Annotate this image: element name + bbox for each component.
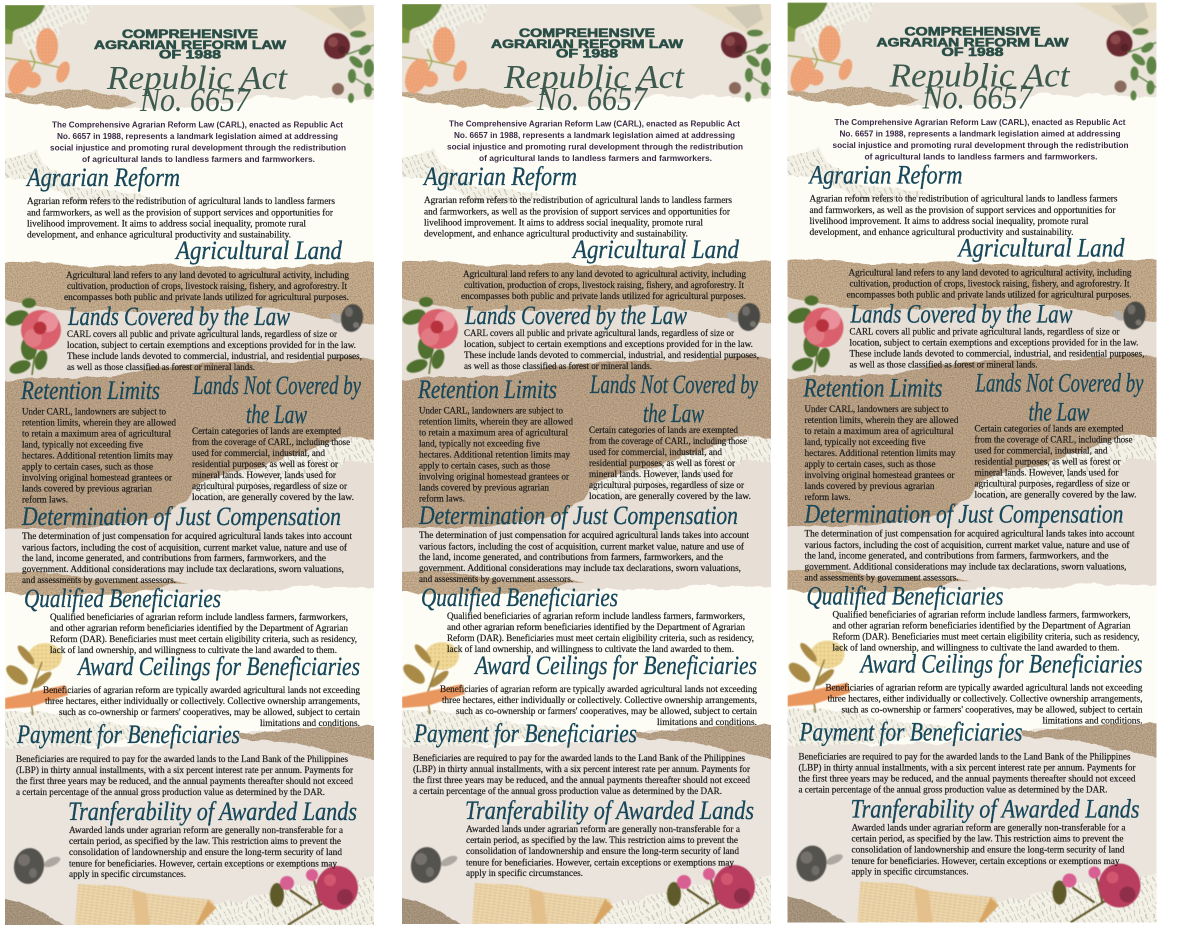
text: Agricultural Land: encompasses both public and private lands utilized for agricultural purposes. [846, 290, 1132, 300]
text: Lands Covered: as well as those classified as forest or mineral lands. [464, 361, 652, 371]
text: Retention Limits: hectares. Additional retention limits may [804, 448, 956, 458]
text: Lands Covered [67, 329, 362, 372]
heading: Lands Not Covered by the Law: the Law [246, 400, 307, 429]
heading: Payment for Beneficiaries: Payment for Beneficiaries [16, 720, 240, 749]
text: Agricultural Land: encompasses both public and private lands utilized for agricultural purposes. [64, 292, 349, 302]
text: Agrarian Reform: and farmworkers, as well as the provision of support services and opportunities for [27, 208, 333, 218]
heading: Lands Not Covered by the Law [589, 370, 758, 428]
text: Lands Covered: These include lands devoted to commercial, industrial, and residential purposes, [67, 351, 362, 361]
text: Retention Limits: hectares. Additional retention limits may [22, 450, 174, 460]
text: Lands Not Covered: agricultural purposes, regardless of size or [974, 478, 1130, 488]
text: Payment: (LBP) in thirty annual installments, with a six percent interest rate per annum. Payments for [413, 764, 750, 774]
intro text: The Comprehensive Agrarian Reform Law (CARL), enacted as Republic Act [449, 118, 740, 128]
text: Just Compensation: various factors, including the cost of acquisition, current market value, nature and use of [804, 540, 1130, 550]
text: Award Ceilings: limitations and conditions. [657, 717, 757, 727]
text: Qualified Beneficiaries: Reform (DAR). Beneficiaries must meet certain eligibility criteria, such as residency, [832, 632, 1140, 642]
icon: butterfly lower [794, 843, 844, 884]
heading: Tranferability of Awarded Lands: Tranferability of Awarded Lands [850, 794, 1140, 824]
text: Award Ceilings: Beneficiaries of agrarian reform are typically awarded agricultural lands not exceeding [440, 684, 757, 694]
text: Just Compensation: various factors, including the cost of acquisition, current market value, nature and use of [419, 542, 744, 552]
text: Retention Limits: land, typically not exceeding five [804, 437, 926, 447]
heading: Lands Covered by the Law: Lands Covered by the Law [67, 302, 291, 331]
title: AGRARIAN REFORM LAW [876, 36, 1069, 50]
heading: Agricultural Land: Agricultural Land [571, 235, 740, 264]
subtitle: Republic Act: No. 6657 [922, 80, 1034, 116]
intro text: No. 6657 in 1988, represents a landmark legislation aimed at addressing [454, 130, 735, 140]
text: Agrarian Reform: development, and enhance agricultural productivity and sustainability. [810, 227, 1074, 237]
text: Retention Limits: lands covered by previous agrarian [22, 484, 153, 494]
text: Tranferability: tenure for beneficiaries. However, certain exceptions or exemptions may [466, 858, 734, 868]
subtitle: Republic Act [106, 60, 289, 119]
text: Agrarian Reform [27, 196, 336, 240]
heading: Agricultural Land: Agricultural Land [174, 236, 343, 265]
text: Lands Not Covered: residential purposes, as well as forest or [192, 459, 338, 469]
text: Agricultural Land [64, 270, 350, 302]
text: Lands Not Covered: mineral lands. However, lands used for [192, 470, 336, 480]
text: Qualified Beneficiaries: and other agrarian reform beneficiaries identified by the Department of Agrarian [832, 620, 1131, 630]
text: Just Compensation: the land, income generated, and contributions from farmers, farmworkers, and the [22, 553, 326, 563]
text: Lands Covered: location, subject to certain exemptions and exceptions provided for in the law. [67, 340, 356, 350]
text: Just Compensation [22, 531, 353, 585]
text: Qualified Beneficiaries: lack of land ownership, and willingness to cultivate the land awarded to them. [50, 645, 337, 655]
decoration: pink flower [270, 866, 358, 925]
subtitle: Republic Act: No. 6657 [536, 81, 649, 118]
text: Payment: the first three years may be reduced, and the annual payments thereafter should not exceed [16, 776, 354, 786]
text: Agricultural Land: Agricultural land refers to any land devoted to agricultural activity, including [463, 269, 747, 279]
title: COMPREHENSIVE [122, 27, 258, 41]
decoration: flowers and book at top [401, 4, 771, 102]
text: Lands Covered [850, 326, 1144, 370]
intro text [832, 117, 1128, 162]
text: Retention Limits: Under CARL, landowners are subject to [804, 404, 949, 414]
heading: Tranferability of Awarded Lands: Tranferability of Awarded Lands [68, 797, 357, 826]
text: Payment: a certain percentage of the annual gross production value as determined by the DAR. [16, 787, 325, 797]
text: Award Ceilings: three hectares, either individually or collectively. Collective ownership arrangements, [442, 695, 757, 705]
intro text: social injustice and promoting rural development through the redistribution [832, 140, 1128, 150]
text: Tranferability: Awarded lands under agrarian reform are generally non-transferable for a [69, 825, 343, 835]
text: Qualified Beneficiaries: Reform (DAR). Beneficiaries must meet certain eligibility criteria, such as residency, [50, 634, 357, 644]
heading: Lands Not Covered by the Law [975, 368, 1144, 426]
text: Just Compensation [419, 530, 750, 584]
decoration: old book [472, 883, 613, 924]
text: Agrarian Reform: livelihood improvement. It aims to address social inequality, promote rural [810, 216, 1089, 226]
heading: Qualified Beneficiaries: Qualified Beneficiaries [24, 584, 221, 613]
text: Award Ceilings: such as co-ownership or farmers' cooperatives, may be allowed, subject to certain [842, 704, 1143, 714]
poster 3 [772, 0, 1172, 927]
heading: Lands Not Covered by the Law: the Law [643, 399, 704, 428]
text: Qualified Beneficiaries: Qualified beneficiaries of agrarian reform include landless farmers, farmworkers, [447, 611, 745, 621]
text: Lands Not Covered [589, 425, 751, 501]
text: Just Compensation: the land, income generated, and contributions from farmers, farmworkers, and the [804, 550, 1108, 560]
text: Lands Not Covered: used for commercial, industrial, and [192, 448, 326, 458]
intro text: of agricultural lands to landless farmers and farmworkers. [82, 154, 315, 164]
text: Just Compensation: government. Additional considerations may include tax declarations, sworn valuations, [419, 563, 741, 573]
text: Tranferability: apply in specific circumstances. [852, 866, 968, 876]
text: Award Ceilings: Beneficiaries of agrarian reform are typically awarded agricultural lands not exceeding [826, 682, 1143, 692]
text: Award Ceilings: limitations and conditions. [260, 718, 360, 728]
text: Qualified Beneficiaries: and other agrarian reform beneficiaries identified by the Department of Agrarian [447, 622, 746, 632]
decoration: old book [858, 882, 998, 922]
icon: butterfly lower [11, 846, 62, 886]
text: Retention Limits: involving original homestead grantees or [804, 470, 955, 480]
text: Lands Covered: These include lands devoted to commercial, industrial, and residential purposes, [464, 350, 759, 360]
title: OF 1988 [556, 46, 618, 60]
text: Agrarian Reform: development, and enhance agricultural productivity and sustainability. [27, 230, 291, 240]
text: Agricultural Land: cultivation, production of crops, livestock raising, fishery, and agroforestry. It [850, 278, 1130, 288]
text: Payment [413, 753, 751, 796]
title: AGRARIAN REFORM LAW [491, 37, 684, 51]
title: OF 1988 [942, 45, 1004, 59]
text: Lands Covered: as well as those classified as forest or mineral lands. [67, 362, 255, 372]
text: Just Compensation: The determination of just compensation for acquired agricultural lands takes into account [804, 528, 1135, 538]
text: Payment [16, 754, 354, 797]
text: Lands Not Covered: agricultural purposes, regardless of size or [589, 480, 744, 490]
heading: Payment for Beneficiaries: Payment for Beneficiaries [413, 719, 637, 748]
text: Lands Not Covered: Certain categories of lands are exempted [589, 425, 739, 435]
text: Lands Not Covered [192, 426, 354, 502]
subtitle: Republic Act: Republic Act [106, 60, 289, 97]
title: COMPREHENSIVE [904, 24, 1040, 38]
heading: Lands Not Covered by the Law: Lands Not Covered by [192, 371, 361, 400]
text: Qualified Beneficiaries: and other agrarian reform beneficiaries identified by the Department of Agrarian [50, 623, 349, 633]
background papers [0, 0, 390, 927]
text: Payment: Beneficiaries are required to pay for the awarded lands to the Land Bank of the Philippines [16, 754, 349, 764]
subtitle: Republic Act [503, 59, 686, 118]
text: Agricultural Land: Agricultural land refers to any land devoted to agricultural activity, including [848, 268, 1132, 278]
text: Payment: the first three years may be reduced, and the annual payments thereafter should not exceed [413, 775, 751, 785]
text: Retention Limits: to retain a maximum area of agricultural [419, 428, 569, 438]
text: Award Ceilings [826, 682, 1143, 726]
decoration: old book [75, 884, 216, 925]
text: Qualified Beneficiaries: Qualified beneficiaries of agrarian reform include landless farmers, farmworkers, [50, 612, 348, 622]
text: Agrarian Reform [810, 194, 1118, 237]
text: Award Ceilings: Beneficiaries of agrarian reform are typically awarded agricultural lands not exceeding [43, 685, 360, 695]
text: Qualified Beneficiaries: Reform (DAR). Beneficiaries must meet certain eligibility criteria, such as residency, [447, 633, 754, 643]
text: Just Compensation: various factors, including the cost of acquisition, current market value, nature and use of [22, 542, 347, 552]
icon: butterfly [725, 301, 762, 333]
decoration: rose [400, 297, 458, 375]
text: Just Compensation: government. Additional considerations may include tax declarations, sworn valuations, [804, 562, 1126, 572]
text: Retention Limits: reform laws. [22, 494, 68, 504]
intro text [447, 118, 743, 163]
heading: Lands Covered by the Law: Lands Covered by the Law [464, 301, 688, 330]
text: Just Compensation: the land, income generated, and contributions from farmers, farmworkers, and the [419, 552, 723, 562]
decoration: dried flower and tape [3, 643, 68, 715]
subtitle: Republic Act: Republic Act [503, 59, 686, 96]
text: Lands Covered [464, 328, 759, 371]
text: Lands Not Covered: location, are generally covered by the law. [589, 491, 751, 501]
text: Qualified Beneficiaries [832, 610, 1140, 652]
heading: Agrarian Reform: Agrarian Reform [25, 163, 180, 192]
title [94, 27, 287, 62]
text: Retention Limits: retention limits, wherein they are allowed [419, 416, 574, 426]
text: Retention Limits: hectares. Additional retention limits may [419, 450, 571, 460]
text: Tranferability: certain period, as specified by the law. This restriction aims to prevent the [466, 835, 738, 845]
text: Payment: a certain percentage of the annual gross production value as determined by the DAR. [413, 786, 722, 796]
background papers [387, 0, 787, 927]
heading: Qualified Beneficiaries: Qualified Beneficiaries [421, 583, 618, 612]
poster 1 [0, 0, 390, 927]
decoration: pink flower [667, 865, 755, 924]
intro text: No. 6657 in 1988, represents a landmark legislation aimed at addressing [840, 128, 1120, 138]
text: Lands Covered: as well as those classified as forest or mineral lands. [850, 360, 1038, 370]
text: Lands Covered: location, subject to certain exemptions and exceptions provided for in the law. [464, 339, 753, 349]
text: Payment: a certain percentage of the annual gross production value as determined by the DAR. [798, 784, 1108, 794]
text: Tranferability: Awarded lands under agrarian reform are generally non-transferable for a [852, 822, 1126, 832]
text: Award Ceilings: three hectares, either individually or collectively. Collective ownership arrangements, [45, 696, 360, 706]
text: Lands Not Covered: from the coverage of CARL, including those [589, 436, 747, 446]
text: Retention Limits: Under CARL, landowners are subject to [419, 406, 563, 416]
text: Lands Not Covered: location, are generally covered by the law. [192, 492, 354, 502]
text: Retention Limits: lands covered by previous agrarian [804, 481, 935, 491]
text: Tranferability: consolidation of landownership and ensure the long-term security of land [69, 847, 343, 857]
heading: Retention Limits: Retention Limits [20, 376, 160, 405]
text: Retention Limits: apply to certain cases, such as those [804, 459, 936, 469]
text: Tranferability: certain period, as specified by the law. This restriction aims to prevent the [69, 836, 341, 846]
text: Retention Limits [419, 406, 574, 504]
decoration: dried flower and tape [400, 642, 465, 714]
heading: Qualified Beneficiaries: Qualified Beneficiaries [806, 582, 1004, 610]
text: Payment: Beneficiaries are required to pay for the awarded lands to the Land Bank of the Philippines [798, 752, 1131, 762]
heading: Agrarian Reform: Agrarian Reform [422, 162, 577, 191]
text: Tranferability: consolidation of landownership and ensure the long-term security of land [466, 846, 740, 856]
text: Retention Limits: to retain a maximum area of agricultural [22, 428, 172, 438]
text: Qualified Beneficiaries: lack of land ownership, and willingness to cultivate the land awarded to them. [832, 642, 1120, 652]
text: Tranferability: apply in specific circumstances. [69, 869, 186, 879]
text: Lands Not Covered: Certain categories of lands are exempted [192, 426, 342, 436]
text: Agricultural Land [461, 269, 747, 301]
text: Lands Covered: CARL covers all public and private agricultural lands, regardless of size or [464, 328, 734, 338]
text: Tranferability: apply in specific circumstances. [466, 868, 583, 878]
intro text [50, 120, 346, 164]
text: Award Ceilings: three hectares, either individually or collectively. Collective ownership arrangements, [828, 694, 1142, 704]
text: Qualified Beneficiaries: Qualified beneficiaries of agrarian reform include landless farmers, farmworkers, [832, 610, 1130, 620]
text: Retention Limits: land, typically not exceeding five [22, 440, 143, 450]
decoration: pink flower [1052, 864, 1140, 922]
icon: butterfly [1110, 300, 1148, 331]
text: Retention Limits: Under CARL, landowners are subject to [22, 406, 166, 416]
text: Retention Limits: retention limits, wherein they are allowed [804, 415, 959, 425]
text: Agricultural Land: encompasses both public and private lands utilized for agricultural purposes. [461, 291, 746, 301]
text: Qualified Beneficiaries [50, 612, 357, 655]
text: Retention Limits: involving original homestead grantees or [419, 472, 569, 482]
text: Agrarian Reform: livelihood improvement. It aims to address social inequality, promote rural [424, 218, 704, 228]
text: Lands Not Covered: agricultural purposes, regardless of size or [192, 481, 347, 491]
heading: Determination of Just Compensation: Determination of Just Compensation [21, 502, 341, 531]
text: Lands Not Covered: from the coverage of CARL, including those [974, 434, 1132, 444]
text: Payment: the first three years may be reduced, and the annual payments thereafter should not exceed [798, 774, 1136, 784]
heading: Tranferability of Awarded Lands: Tranferability of Awarded Lands [465, 796, 754, 825]
decoration: rose [786, 296, 844, 374]
intro text: No. 6657 in 1988, represents a landmark legislation aimed at addressing [57, 131, 338, 141]
text: Lands Not Covered: used for commercial, industrial, and [589, 447, 723, 457]
title [876, 24, 1069, 59]
subtitle: Republic Act: No. 6657 [139, 82, 252, 119]
icon: butterfly [328, 302, 365, 334]
text: Tranferability: certain period, as specified by the law. This restriction aims to prevent the [852, 834, 1124, 844]
text: Agrarian Reform: Agrarian reform refers to the redistribution of agricultural lands to landless farmers [810, 194, 1118, 204]
text: Retention Limits: reform laws. [419, 494, 465, 504]
decoration: rose [3, 298, 61, 376]
text: Agricultural Land [846, 268, 1132, 300]
text: Tranferability: tenure for beneficiaries. However, certain exceptions or exemptions may [69, 858, 337, 868]
text: Lands Not Covered: residential purposes, as well as forest or [974, 456, 1120, 466]
text: Lands Not Covered: residential purposes, as well as forest or [589, 458, 735, 468]
heading: Determination of Just Compensation: Determination of Just Compensation [418, 501, 738, 530]
text: Award Ceilings: such as co-ownership or farmers' cooperatives, may be allowed, subject to certain [59, 707, 361, 717]
heading: Retention Limits: Retention Limits [417, 375, 557, 404]
text: Lands Covered: CARL covers all public and private agricultural lands, regardless of size or [67, 329, 337, 339]
subtitle: Republic Act [888, 58, 1071, 116]
text: Just Compensation: government. Additional considerations may include tax declarations, sworn valuations, [22, 564, 344, 574]
text: Just Compensation: and assessments by government assessors. [804, 572, 958, 582]
intro text: of agricultural lands to landless farmers and farmworkers. [864, 152, 1098, 162]
text: Agrarian Reform: and farmworkers, as well as the provision of support services and opportunities for [424, 206, 730, 216]
text: Tranferability [852, 822, 1126, 876]
text: Retention Limits: reform laws. [804, 492, 850, 502]
intro text: social injustice and promoting rural development through the redistribution [50, 142, 346, 152]
decoration: dried flower and tape [785, 640, 850, 712]
text: Agrarian Reform: livelihood improvement. It aims to address social inequality, promote rural [27, 218, 307, 228]
text: Tranferability [69, 825, 343, 879]
text: Retention Limits [804, 404, 959, 502]
text: Retention Limits: involving original homestead grantees or [22, 472, 172, 482]
text: Agrarian Reform: and farmworkers, as well as the provision of support services and opportunities for [810, 205, 1116, 215]
background papers [772, 0, 1172, 927]
text: Tranferability [466, 824, 740, 878]
poster 2 [387, 0, 787, 927]
heading: Lands Not Covered by the Law: the Law [1028, 398, 1090, 426]
text: Tranferability: tenure for beneficiaries. However, certain exceptions or exemptions may [852, 856, 1120, 866]
intro text: social injustice and promoting rural development through the redistribution [447, 142, 743, 152]
text: Just Compensation: The determination of just compensation for acquired agricultural lands takes into account [419, 530, 750, 540]
text: Retention Limits: apply to certain cases, such as those [22, 462, 153, 472]
text: Payment: (LBP) in thirty annual installments, with a six percent interest rate per annum. Payments for [798, 762, 1136, 772]
text: Lands Not Covered [974, 424, 1136, 500]
title: OF 1988 [159, 48, 221, 62]
heading: Award Ceilings for Beneficiaries: Award Ceilings for Beneficiaries [859, 650, 1142, 678]
text: Agrarian Reform: Agrarian reform refers to the redistribution of agricultural lands to landless farmers [27, 196, 336, 206]
text: Award Ceilings [43, 685, 361, 728]
text: Award Ceilings: such as co-ownership or farmers' cooperatives, may be allowed, subject to certain [456, 706, 758, 716]
heading: Lands Not Covered by the Law [192, 371, 361, 429]
text: Retention Limits [22, 406, 177, 504]
intro text: of agricultural lands to landless farmers and farmworkers. [479, 153, 712, 163]
heading: Agricultural Land: Agricultural Land [957, 234, 1125, 262]
text: Retention Limits: apply to certain cases, such as those [419, 460, 550, 470]
text: Lands Not Covered: mineral lands. However, lands used for [589, 469, 733, 479]
text: Agrarian Reform: Agrarian reform refers to the redistribution of agricultural lands to landless farmers [424, 195, 733, 205]
decoration: flowers and book at top [786, 2, 1156, 100]
text: Qualified Beneficiaries: lack of land ownership, and willingness to cultivate the land awarded to them. [447, 644, 734, 654]
heading: Lands Not Covered by the Law: Lands Not Covered by [589, 370, 758, 399]
text: Retention Limits: retention limits, wherein they are allowed [22, 418, 177, 428]
text: Retention Limits: lands covered by previous agrarian [419, 482, 550, 492]
text: Just Compensation: The determination of just compensation for acquired agricultural lands takes into account [22, 531, 353, 541]
text: Tranferability: consolidation of landownership and ensure the long-term security of land [852, 844, 1125, 854]
text: Lands Not Covered: Certain categories of lands are exempted [974, 424, 1124, 434]
text: Lands Not Covered: location, are generally covered by the law. [974, 490, 1136, 500]
title: AGRARIAN REFORM LAW [94, 38, 287, 52]
text: Just Compensation: and assessments by government assessors. [419, 574, 573, 584]
heading: Lands Covered by the Law: Lands Covered by the Law [850, 300, 1073, 328]
text: Payment: Beneficiaries are required to pay for the awarded lands to the Land Bank of the Philippines [413, 753, 746, 763]
text: Tranferability: Awarded lands under agrarian reform are generally non-transferable for a [466, 824, 740, 834]
title [491, 26, 684, 60]
heading: Award Ceilings for Beneficiaries: Award Ceilings for Beneficiaries [76, 652, 360, 681]
text: Retention Limits: to retain a maximum area of agricultural [804, 426, 954, 436]
text: Agricultural Land: cultivation, production of crops, livestock raising, fishery, and agroforestry. It [67, 281, 347, 291]
text: Payment [798, 752, 1136, 794]
text: Lands Covered: location, subject to certain exemptions and exceptions provided for in the law. [850, 338, 1138, 348]
icon: butterfly lower [408, 845, 459, 885]
text: Lands Covered: These include lands devoted to commercial, industrial, and residential purposes, [850, 348, 1145, 358]
text: Agrarian Reform [424, 195, 733, 238]
heading: Retention Limits: Retention Limits [803, 374, 942, 402]
subtitle: Republic Act: Republic Act [888, 58, 1071, 94]
text: Agricultural Land: cultivation, production of crops, livestock raising, fishery, and agroforestry. It [464, 280, 744, 290]
intro text: The Comprehensive Agrarian Reform Law (CARL), enacted as Republic Act [834, 117, 1126, 127]
decoration: flowers and book at top [4, 5, 374, 103]
text: Award Ceilings [440, 684, 758, 727]
text: Payment: (LBP) in thirty annual installments, with a six percent interest rate per annum. Payments for [16, 765, 353, 775]
heading: Payment for Beneficiaries: Payment for Beneficiaries [799, 718, 1023, 746]
heading: Award Ceilings for Beneficiaries: Award Ceilings for Beneficiaries [473, 651, 757, 680]
text: Agrarian Reform: development, and enhance agricultural productivity and sustainability. [424, 228, 688, 238]
text: Lands Not Covered: from the coverage of CARL, including those [192, 437, 350, 447]
text: Lands Not Covered: used for commercial, industrial, and [974, 446, 1108, 456]
text: Just Compensation: and assessments by government assessors. [22, 575, 176, 585]
text: Retention Limits: land, typically not exceeding five [419, 438, 540, 448]
heading: Determination of Just Compensation: Determination of Just Compensation [804, 500, 1124, 528]
title: COMPREHENSIVE [519, 26, 655, 40]
text: Just Compensation [804, 528, 1135, 582]
text: Lands Covered: CARL covers all public and private agricultural lands, regardless of size or [850, 326, 1120, 336]
text: Lands Not Covered: mineral lands. However, lands used for [974, 468, 1118, 478]
text: Agricultural Land: Agricultural land refers to any land devoted to agricultural activity, including [66, 270, 350, 280]
heading: Agrarian Reform: Agrarian Reform [808, 160, 962, 190]
intro text: The Comprehensive Agrarian Reform Law (CARL), enacted as Republic Act [52, 120, 343, 130]
text: Award Ceilings: limitations and conditions. [1042, 716, 1142, 726]
text: Qualified Beneficiaries [447, 611, 754, 654]
